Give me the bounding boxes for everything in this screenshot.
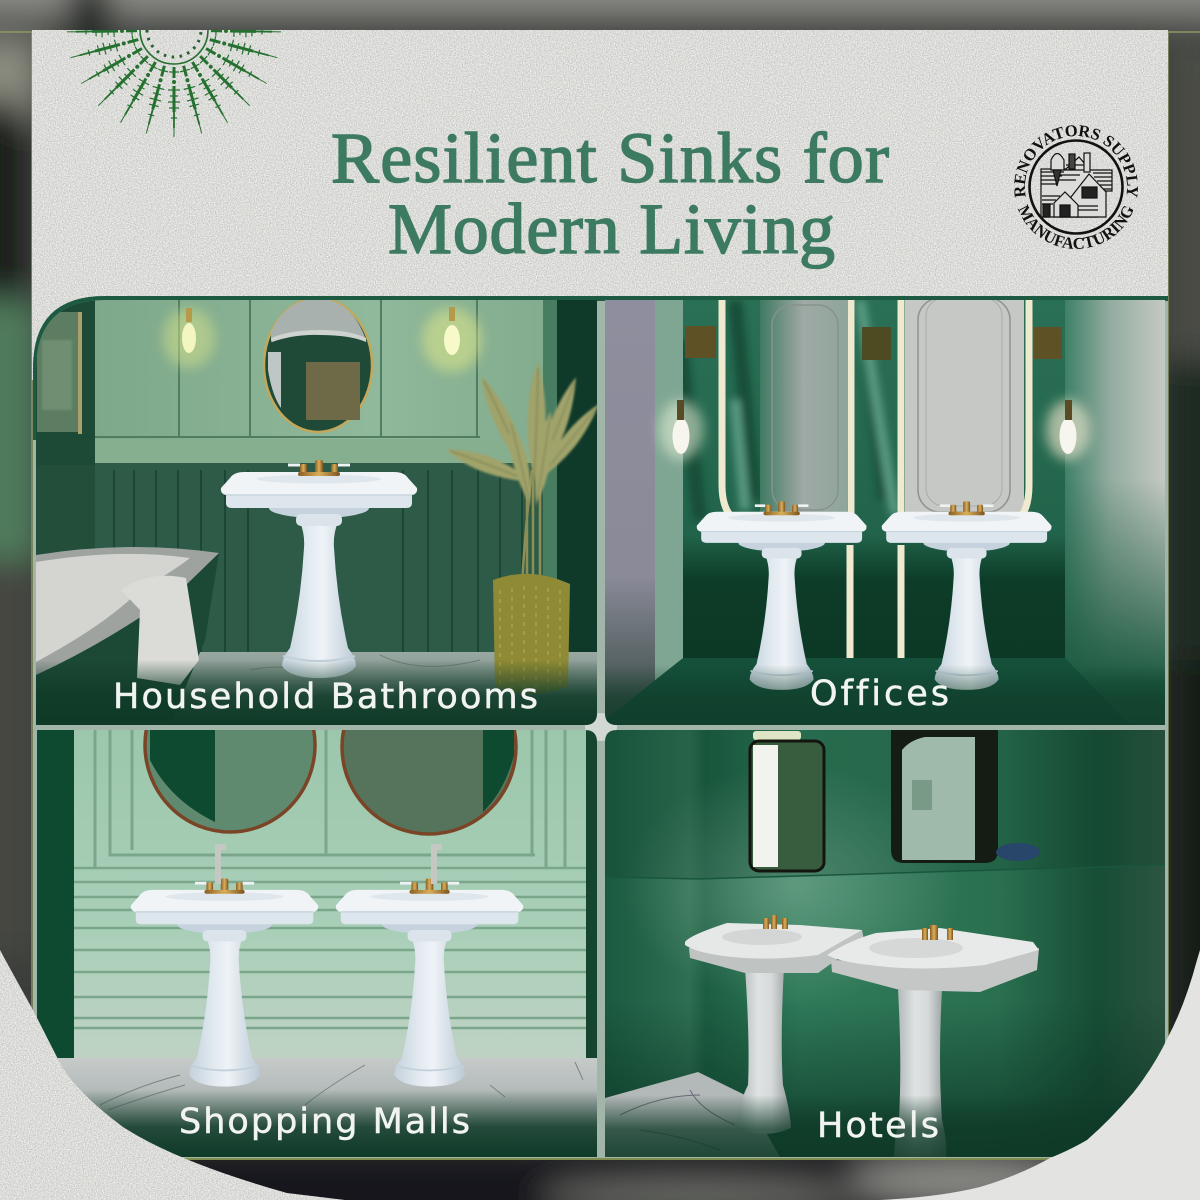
wall mouldings <box>95 300 480 438</box>
wall lamp right <box>422 307 482 372</box>
round mirror right <box>342 660 516 834</box>
right marble wall <box>1065 300 1165 725</box>
green wall <box>605 730 1165 1157</box>
arched panel right <box>905 298 1024 515</box>
oval mirror <box>264 298 372 432</box>
wall joint <box>605 865 1165 879</box>
upper wall shade <box>605 730 1165 879</box>
pale green wall <box>74 730 586 1060</box>
left dark window wall <box>36 300 95 465</box>
left marble strip <box>655 300 683 690</box>
marble floor corner <box>605 1072 780 1157</box>
olive bottom line <box>170 1158 1050 1160</box>
bronze bracket middle <box>862 327 891 360</box>
round mirror left <box>145 658 315 832</box>
sink left <box>685 915 864 1134</box>
wall slats <box>74 868 586 1028</box>
paper bottom-right corner <box>880 950 1200 1200</box>
dark right column <box>543 300 597 660</box>
label: shopping malls: Shopping Malls <box>179 1102 470 1142</box>
mirror right <box>891 730 998 863</box>
lamp <box>753 731 801 740</box>
panel: hotels <box>605 730 1165 1157</box>
label shade <box>605 665 1165 725</box>
marble floor <box>170 652 597 725</box>
faucet spouts <box>218 847 442 884</box>
arched panel left <box>760 300 847 515</box>
bathtub <box>36 547 219 725</box>
label shade <box>37 1090 597 1157</box>
dark right edge <box>586 730 597 1065</box>
logo: renovators supply manufacturing: RENOVATORS SUPPLY <box>1014 125 1138 198</box>
light strips <box>722 300 1029 662</box>
dark bay wall <box>683 300 1065 658</box>
label: offices: Offices <box>810 674 949 714</box>
green floor <box>605 658 1130 725</box>
bronze bracket right <box>1034 327 1062 359</box>
label: household bathrooms: Household Bathrooms <box>113 677 538 717</box>
house drawing <box>1041 153 1112 217</box>
logo: renovators supply manufacturing <box>1014 125 1138 249</box>
label shade <box>605 1095 1165 1157</box>
bronze bracket left <box>685 326 716 358</box>
sunburst ornament <box>67 25 281 137</box>
dark side columns <box>37 730 74 1070</box>
window <box>37 312 82 434</box>
dark wainscot <box>95 463 543 652</box>
label shade <box>36 660 597 725</box>
sink left <box>131 878 318 1087</box>
wall <box>36 300 543 439</box>
paper header panel <box>32 30 1168 380</box>
wall lamp left <box>659 400 703 460</box>
dark flowers <box>996 843 1040 861</box>
label: hotels: Hotels <box>817 1106 939 1146</box>
mirror left <box>750 741 824 871</box>
title: Modern Living <box>388 189 835 269</box>
logo: renovators supply manufacturing: MANUFACTURING <box>1018 204 1134 249</box>
sink right <box>882 501 1052 690</box>
panel: shopping malls <box>37 730 597 1157</box>
photo grid backing with pale gaps <box>33 296 1168 1159</box>
wall lamp right <box>1046 400 1090 460</box>
lower dark shade <box>605 1000 1165 1157</box>
panel: offices <box>605 298 1165 725</box>
left lilac panel <box>605 300 655 725</box>
moulding <box>95 730 565 868</box>
sink <box>221 460 417 678</box>
marble streaks <box>680 300 895 520</box>
title <box>331 118 889 269</box>
paper bottom-left corner <box>0 950 345 1200</box>
frieze band <box>95 439 545 463</box>
wall glow <box>623 765 963 1005</box>
title: Resilient Sinks for <box>331 118 889 198</box>
sink right <box>336 878 523 1087</box>
woven vase <box>493 574 570 694</box>
wall lamp left <box>163 308 215 368</box>
panel: household bathrooms <box>36 298 606 725</box>
sink right <box>827 925 1039 1157</box>
pampas plant <box>446 363 597 576</box>
marble floor <box>37 1058 597 1157</box>
sink left <box>697 501 867 690</box>
